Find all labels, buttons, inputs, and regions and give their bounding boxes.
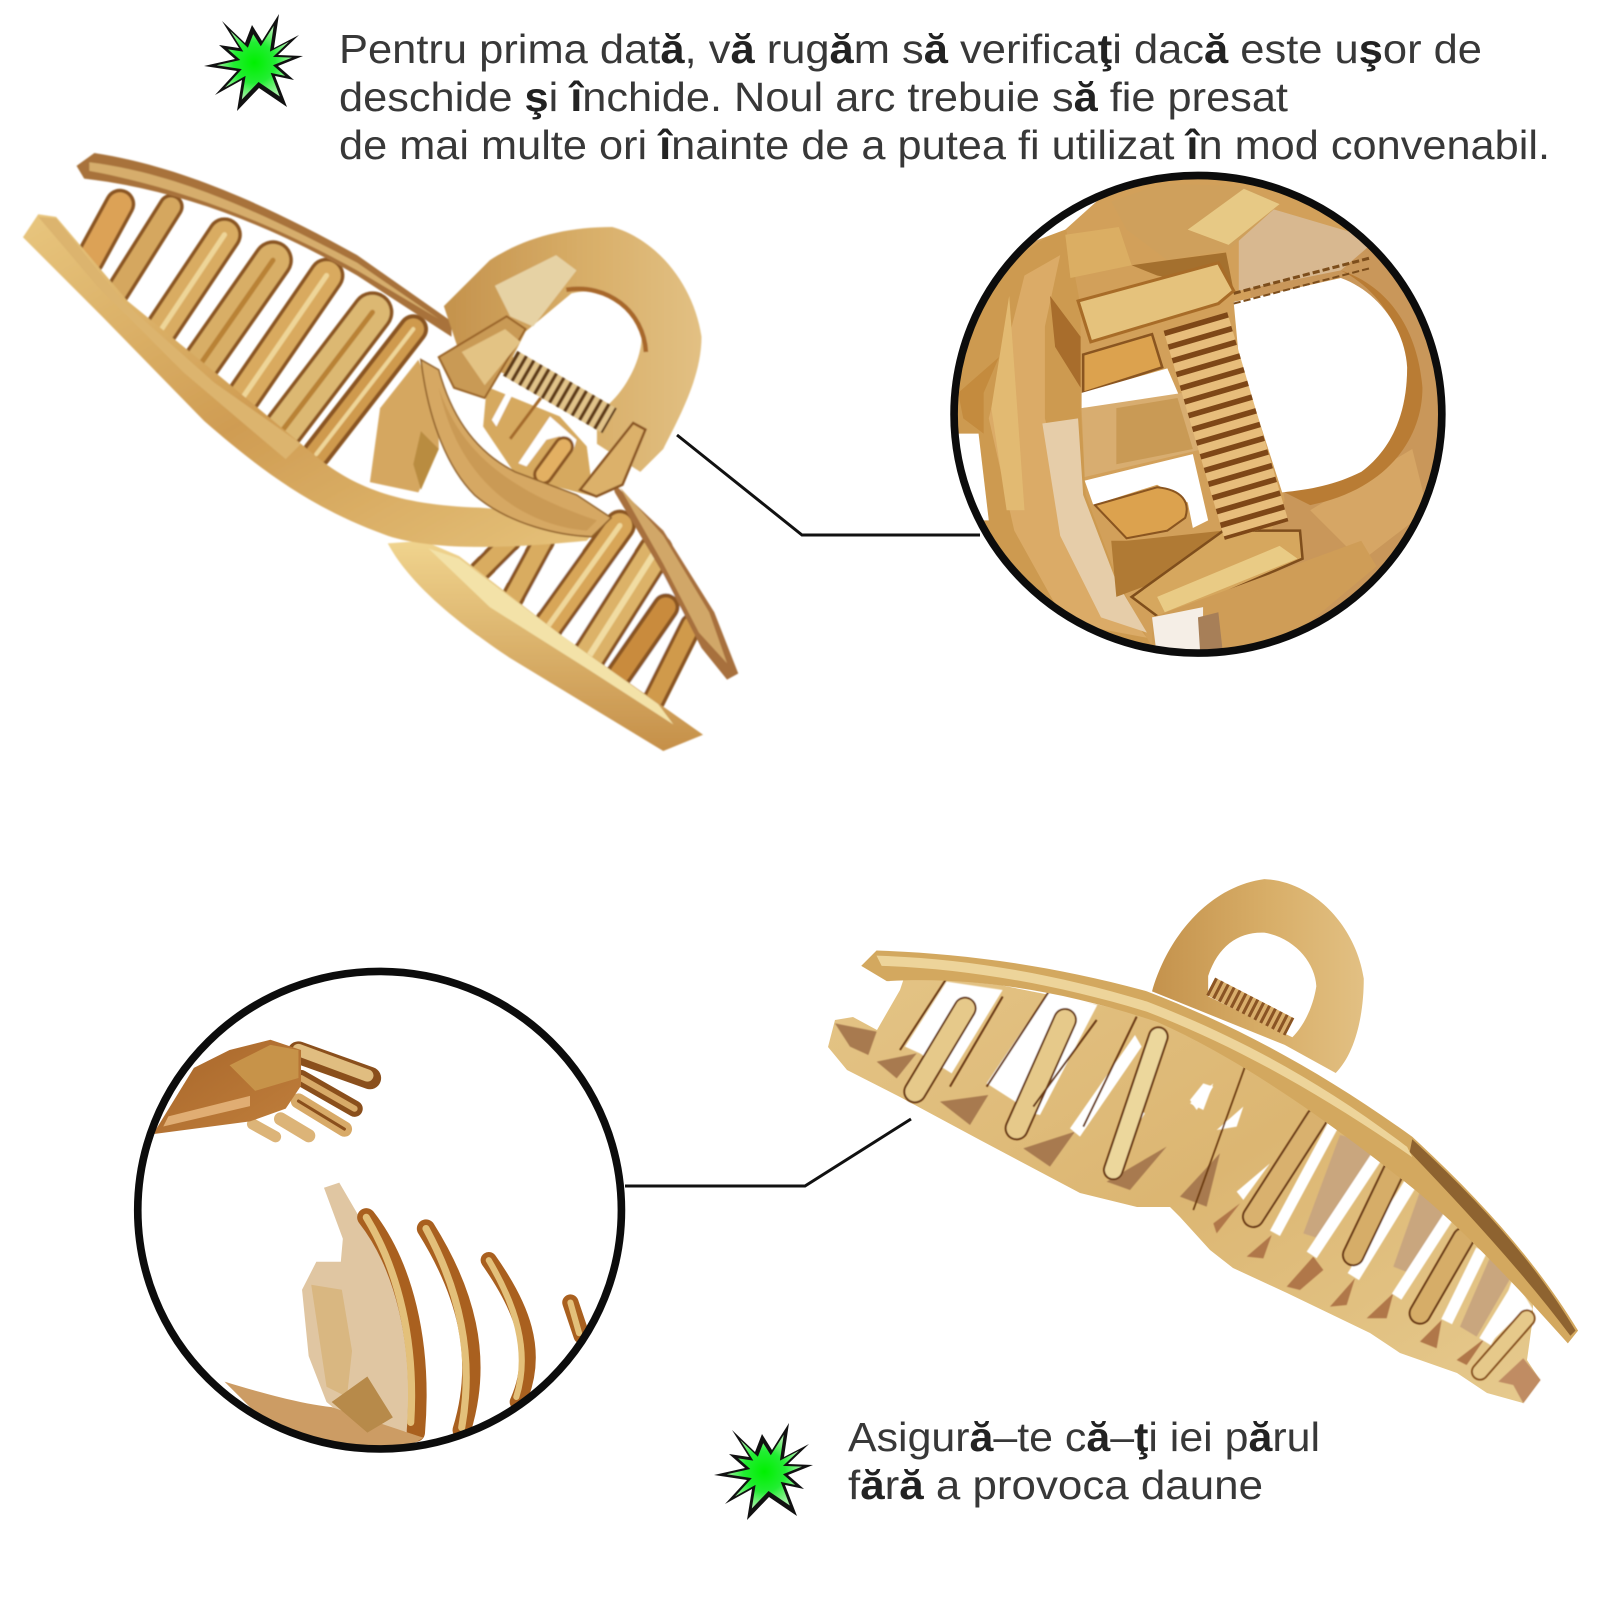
text block: bottom note: Asigură–te că–ţi iei părul: [848, 1414, 1320, 1460]
connector line: teeth detail to lower clip: [625, 1119, 911, 1186]
brown chunk: [153, 1040, 301, 1134]
fingers: [253, 1050, 370, 1137]
ring background: [1250, 248, 1438, 621]
body: [828, 975, 1540, 1403]
lower teeth: [474, 526, 694, 707]
connector line: top clip to spring detail: [677, 435, 980, 535]
lower blocks: [1111, 531, 1223, 597]
ribs: [366, 1217, 582, 1433]
ring hole: [1234, 278, 1407, 492]
icon: green star top: [204, 14, 303, 111]
text block: bottom note: fără a provoca daune: [848, 1462, 1263, 1508]
slats and gaps: [1083, 334, 1162, 393]
upper cross bar: [1078, 263, 1234, 342]
icon: green star bottom: [714, 1423, 813, 1520]
handle ring: [444, 227, 702, 472]
text block: bottom note: [848, 1414, 1320, 1508]
illustration: closed hair claw clip: [828, 879, 1578, 1403]
left band: [958, 230, 1150, 644]
upper teeth: [89, 204, 413, 454]
text block: top instructions: [339, 26, 1550, 168]
spring blocks: [439, 316, 526, 398]
coil spring: [1195, 321, 1257, 531]
text block: top instructions: de mai multe ori înainte de a putea fi utilizat în mod convenabil.: [339, 122, 1550, 168]
illustration: open hair claw clip: [23, 153, 738, 751]
top blocks: [1234, 194, 1274, 241]
top bar: [77, 153, 452, 337]
left half teeth: [835, 978, 1220, 1207]
lower fragment: [224, 1382, 424, 1446]
lower bar pieces: [612, 482, 738, 680]
pale shell: [302, 1183, 416, 1433]
slats under spring: [483, 387, 593, 496]
spring: [510, 363, 610, 421]
handle: [1152, 879, 1364, 1073]
top bar: [861, 951, 1578, 1343]
detail circle: teeth close-up: [138, 971, 621, 1458]
text block: top instructions: deschide şi închide. Noul arc trebuie s ă fie presat: [339, 74, 1289, 120]
lower bar of upper half: [23, 214, 607, 547]
detail circle: spring close-up: [943, 176, 1463, 663]
right half teeth: [1190, 1067, 1541, 1403]
center wedge: [370, 360, 439, 492]
crossing arm: [421, 360, 611, 537]
text block: top instructions: Pentru prima dat ă, vă rugăm să verificaţi dacă este uşor de: [339, 26, 1482, 72]
